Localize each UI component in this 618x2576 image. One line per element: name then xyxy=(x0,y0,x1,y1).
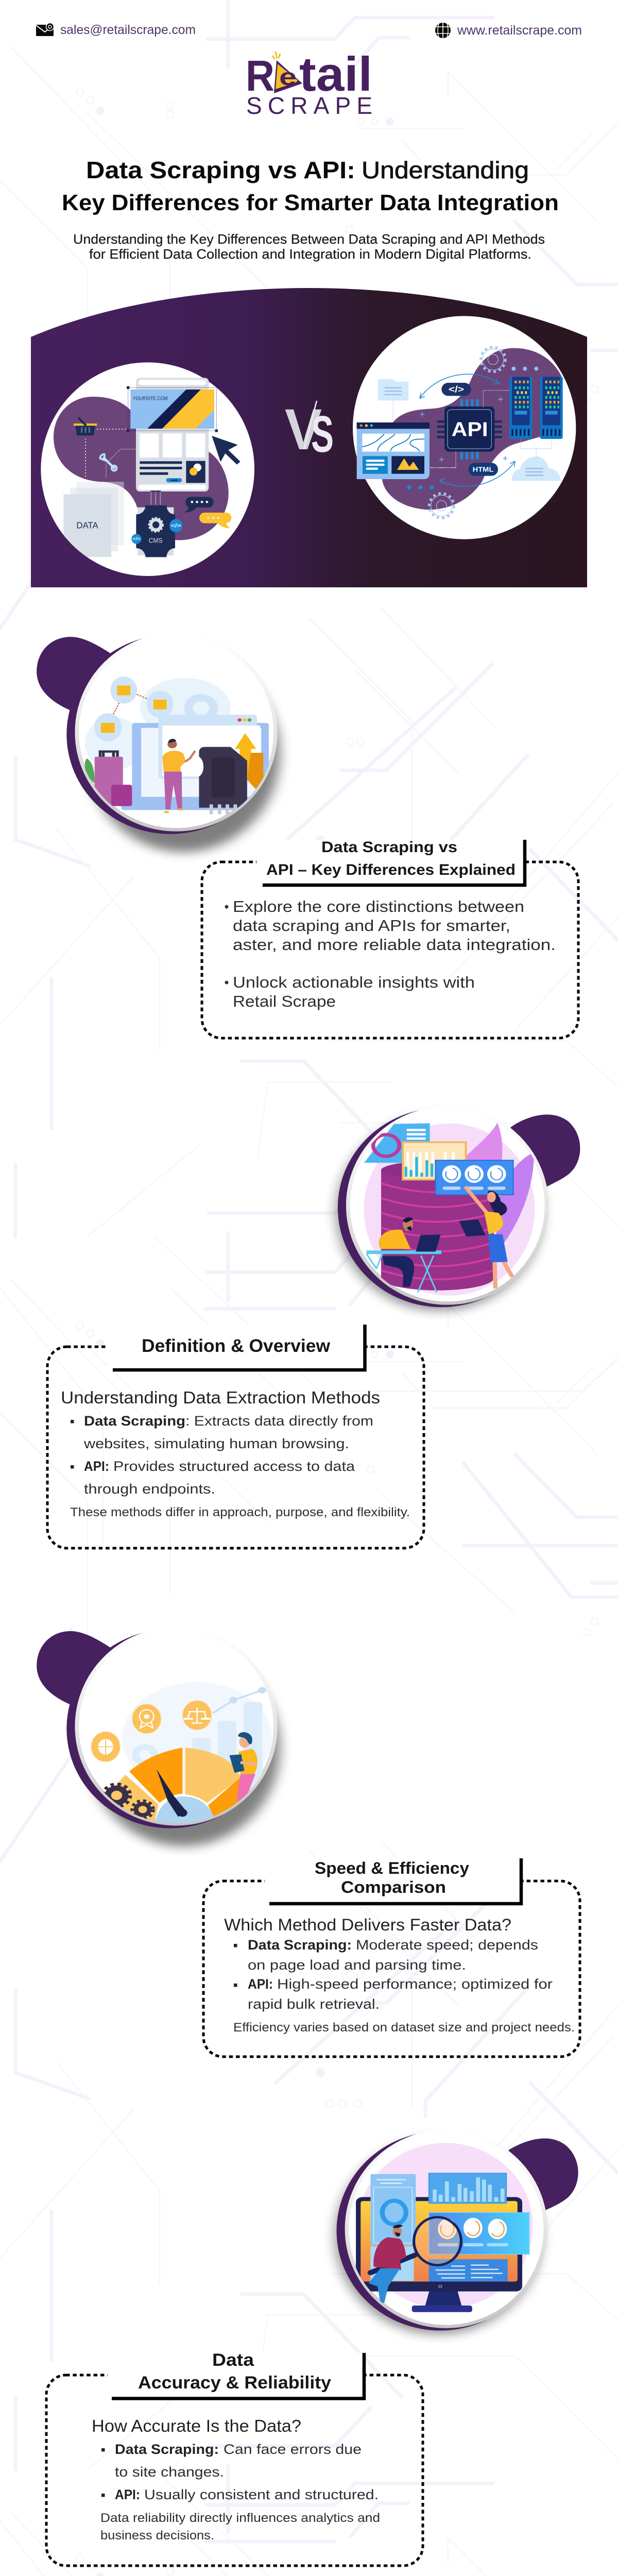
data pages xyxy=(63,482,124,557)
web page mockup xyxy=(127,378,218,492)
chat bubbles xyxy=(184,497,231,528)
section 1: key differences explained xyxy=(37,635,578,1038)
body text: on page load and parsing time. xyxy=(248,1957,466,1973)
body text: Provides structured access to data xyxy=(113,1459,355,1474)
body text xyxy=(61,1388,410,1519)
body text xyxy=(92,2416,380,2543)
heading xyxy=(256,839,525,886)
heading: Speed & Efficiency xyxy=(315,1859,469,1877)
code pill xyxy=(441,383,471,396)
bullet list: Retail Scrape xyxy=(233,992,336,1010)
subtitle: Understanding the Key Differences Between Data Scraping and API Methods xyxy=(73,231,545,247)
bullet list: Unlock actionable insights with xyxy=(233,973,475,991)
content box xyxy=(202,862,578,1038)
cloud xyxy=(512,439,561,481)
CMS block xyxy=(131,490,182,557)
body text: Can face errors due xyxy=(224,2442,362,2457)
body text: Data reliability directly influences analytics and xyxy=(100,2511,380,2525)
heading: API – Key Differences Explained xyxy=(266,861,516,878)
illustration: data scraping xyxy=(41,362,254,576)
section 3: speed and efficiency xyxy=(37,1629,580,2057)
hero panel: data scraping vs api xyxy=(31,288,587,587)
body text: API: xyxy=(248,1976,273,1992)
data pages: DATA xyxy=(76,520,98,531)
illustration: speed gauge xyxy=(37,1629,280,1846)
gears and dots xyxy=(409,347,507,518)
heading xyxy=(108,1325,365,1370)
body text: rapid bulk retrieval. xyxy=(248,1996,380,2012)
bullet list xyxy=(225,897,556,1010)
VS mark: V xyxy=(285,397,322,462)
illustration: monitor with magnifier xyxy=(335,2131,578,2334)
API chip: API xyxy=(452,419,488,441)
HTML pill: HTML xyxy=(473,466,494,473)
body text: Data Scraping: xyxy=(115,2442,219,2457)
header xyxy=(36,23,582,38)
body text: Which Method Delivers Faster Data? xyxy=(224,1916,511,1934)
body text: : Extracts data directly from xyxy=(185,1413,373,1429)
body text: business decisions. xyxy=(100,2529,214,2543)
body text: through endpoints. xyxy=(84,1481,215,1497)
heading: Comparison xyxy=(341,1878,446,1896)
heading: Data xyxy=(212,2350,254,2370)
body text: to site changes. xyxy=(115,2464,224,2480)
hero background arch xyxy=(31,288,587,587)
body text xyxy=(224,1916,575,2035)
heading: Accuracy & Reliability xyxy=(138,2373,331,2393)
body text: Data Scraping xyxy=(84,1413,185,1429)
title xyxy=(62,157,559,215)
logo xyxy=(246,47,372,119)
HTML pill xyxy=(469,463,498,476)
icon: globe xyxy=(435,23,451,38)
logo: e xyxy=(279,63,297,90)
illustration: api xyxy=(353,316,576,539)
body text: websites, simulating human browsing. xyxy=(83,1436,349,1451)
body text: Understanding Data Extraction Methods xyxy=(61,1388,380,1407)
CMS block: CMS xyxy=(149,537,163,545)
arrows xyxy=(420,374,515,486)
section 4: data accuracy and reliability xyxy=(46,2131,578,2566)
logo: R xyxy=(246,52,274,100)
body text: These methods differ in approach, purpose, and flexibility. xyxy=(70,1505,410,1519)
logo: SCRAPE xyxy=(246,92,372,119)
icon: basket xyxy=(74,418,127,478)
body text: Efficiency varies based on dataset size and project needs. xyxy=(233,2021,575,2035)
content box xyxy=(46,2375,423,2566)
body text: High-speed performance; optimized for xyxy=(277,1976,553,1992)
folder xyxy=(378,379,408,421)
logo: tail xyxy=(299,47,372,101)
illustration: data storage xyxy=(37,635,280,852)
purple blob xyxy=(382,348,562,510)
title: Data Scraping vs API: xyxy=(86,157,355,183)
body text: Usually consistent and structured. xyxy=(144,2487,379,2502)
API chip xyxy=(430,391,510,468)
heading xyxy=(108,2350,364,2399)
body text: Moderate speed; depends xyxy=(356,1937,538,1953)
email address: sales@retailscrape.com xyxy=(60,23,196,37)
heading: Data Scraping vs xyxy=(321,839,457,856)
content box xyxy=(203,1881,580,2057)
title: Key Differences for Smarter Data Integration xyxy=(62,190,559,215)
heading: Definition & Overview xyxy=(142,1336,331,1356)
body text: API: xyxy=(84,1459,109,1474)
body text: How Accurate Is the Data? xyxy=(92,2416,301,2435)
purple blob xyxy=(54,397,229,540)
illustration: database team xyxy=(336,1108,580,1311)
bullet list: aster, and more reliable data integration. xyxy=(233,936,556,954)
section 2: definition and overview xyxy=(47,1108,580,1548)
code pill: </> xyxy=(449,384,464,395)
web page mockup: YOURSITE.COM xyxy=(133,396,168,401)
content box xyxy=(47,1347,424,1548)
title: Understanding xyxy=(362,157,529,183)
icon: cursor arrow xyxy=(212,436,241,465)
website address: www.retailscrape.com xyxy=(457,23,582,38)
CMS block: </> xyxy=(132,537,141,541)
body text: Data Scraping: xyxy=(248,1937,352,1953)
CMS block: </> xyxy=(171,523,181,529)
subtitle xyxy=(73,231,545,262)
bullet list: data scraping and APIs for smarter, xyxy=(233,917,510,935)
icon: wrench xyxy=(100,449,135,478)
body text: API: xyxy=(115,2487,140,2502)
icon: mail xyxy=(36,23,54,36)
subtitle: for Efficient Data Collection and Integration in Modern Digital Platforms. xyxy=(89,246,531,262)
browser window xyxy=(357,422,456,479)
servers xyxy=(509,369,563,439)
VS mark: S xyxy=(311,405,334,463)
bullet list: Explore the core distinctions between xyxy=(233,897,524,916)
heading xyxy=(265,1858,521,1904)
